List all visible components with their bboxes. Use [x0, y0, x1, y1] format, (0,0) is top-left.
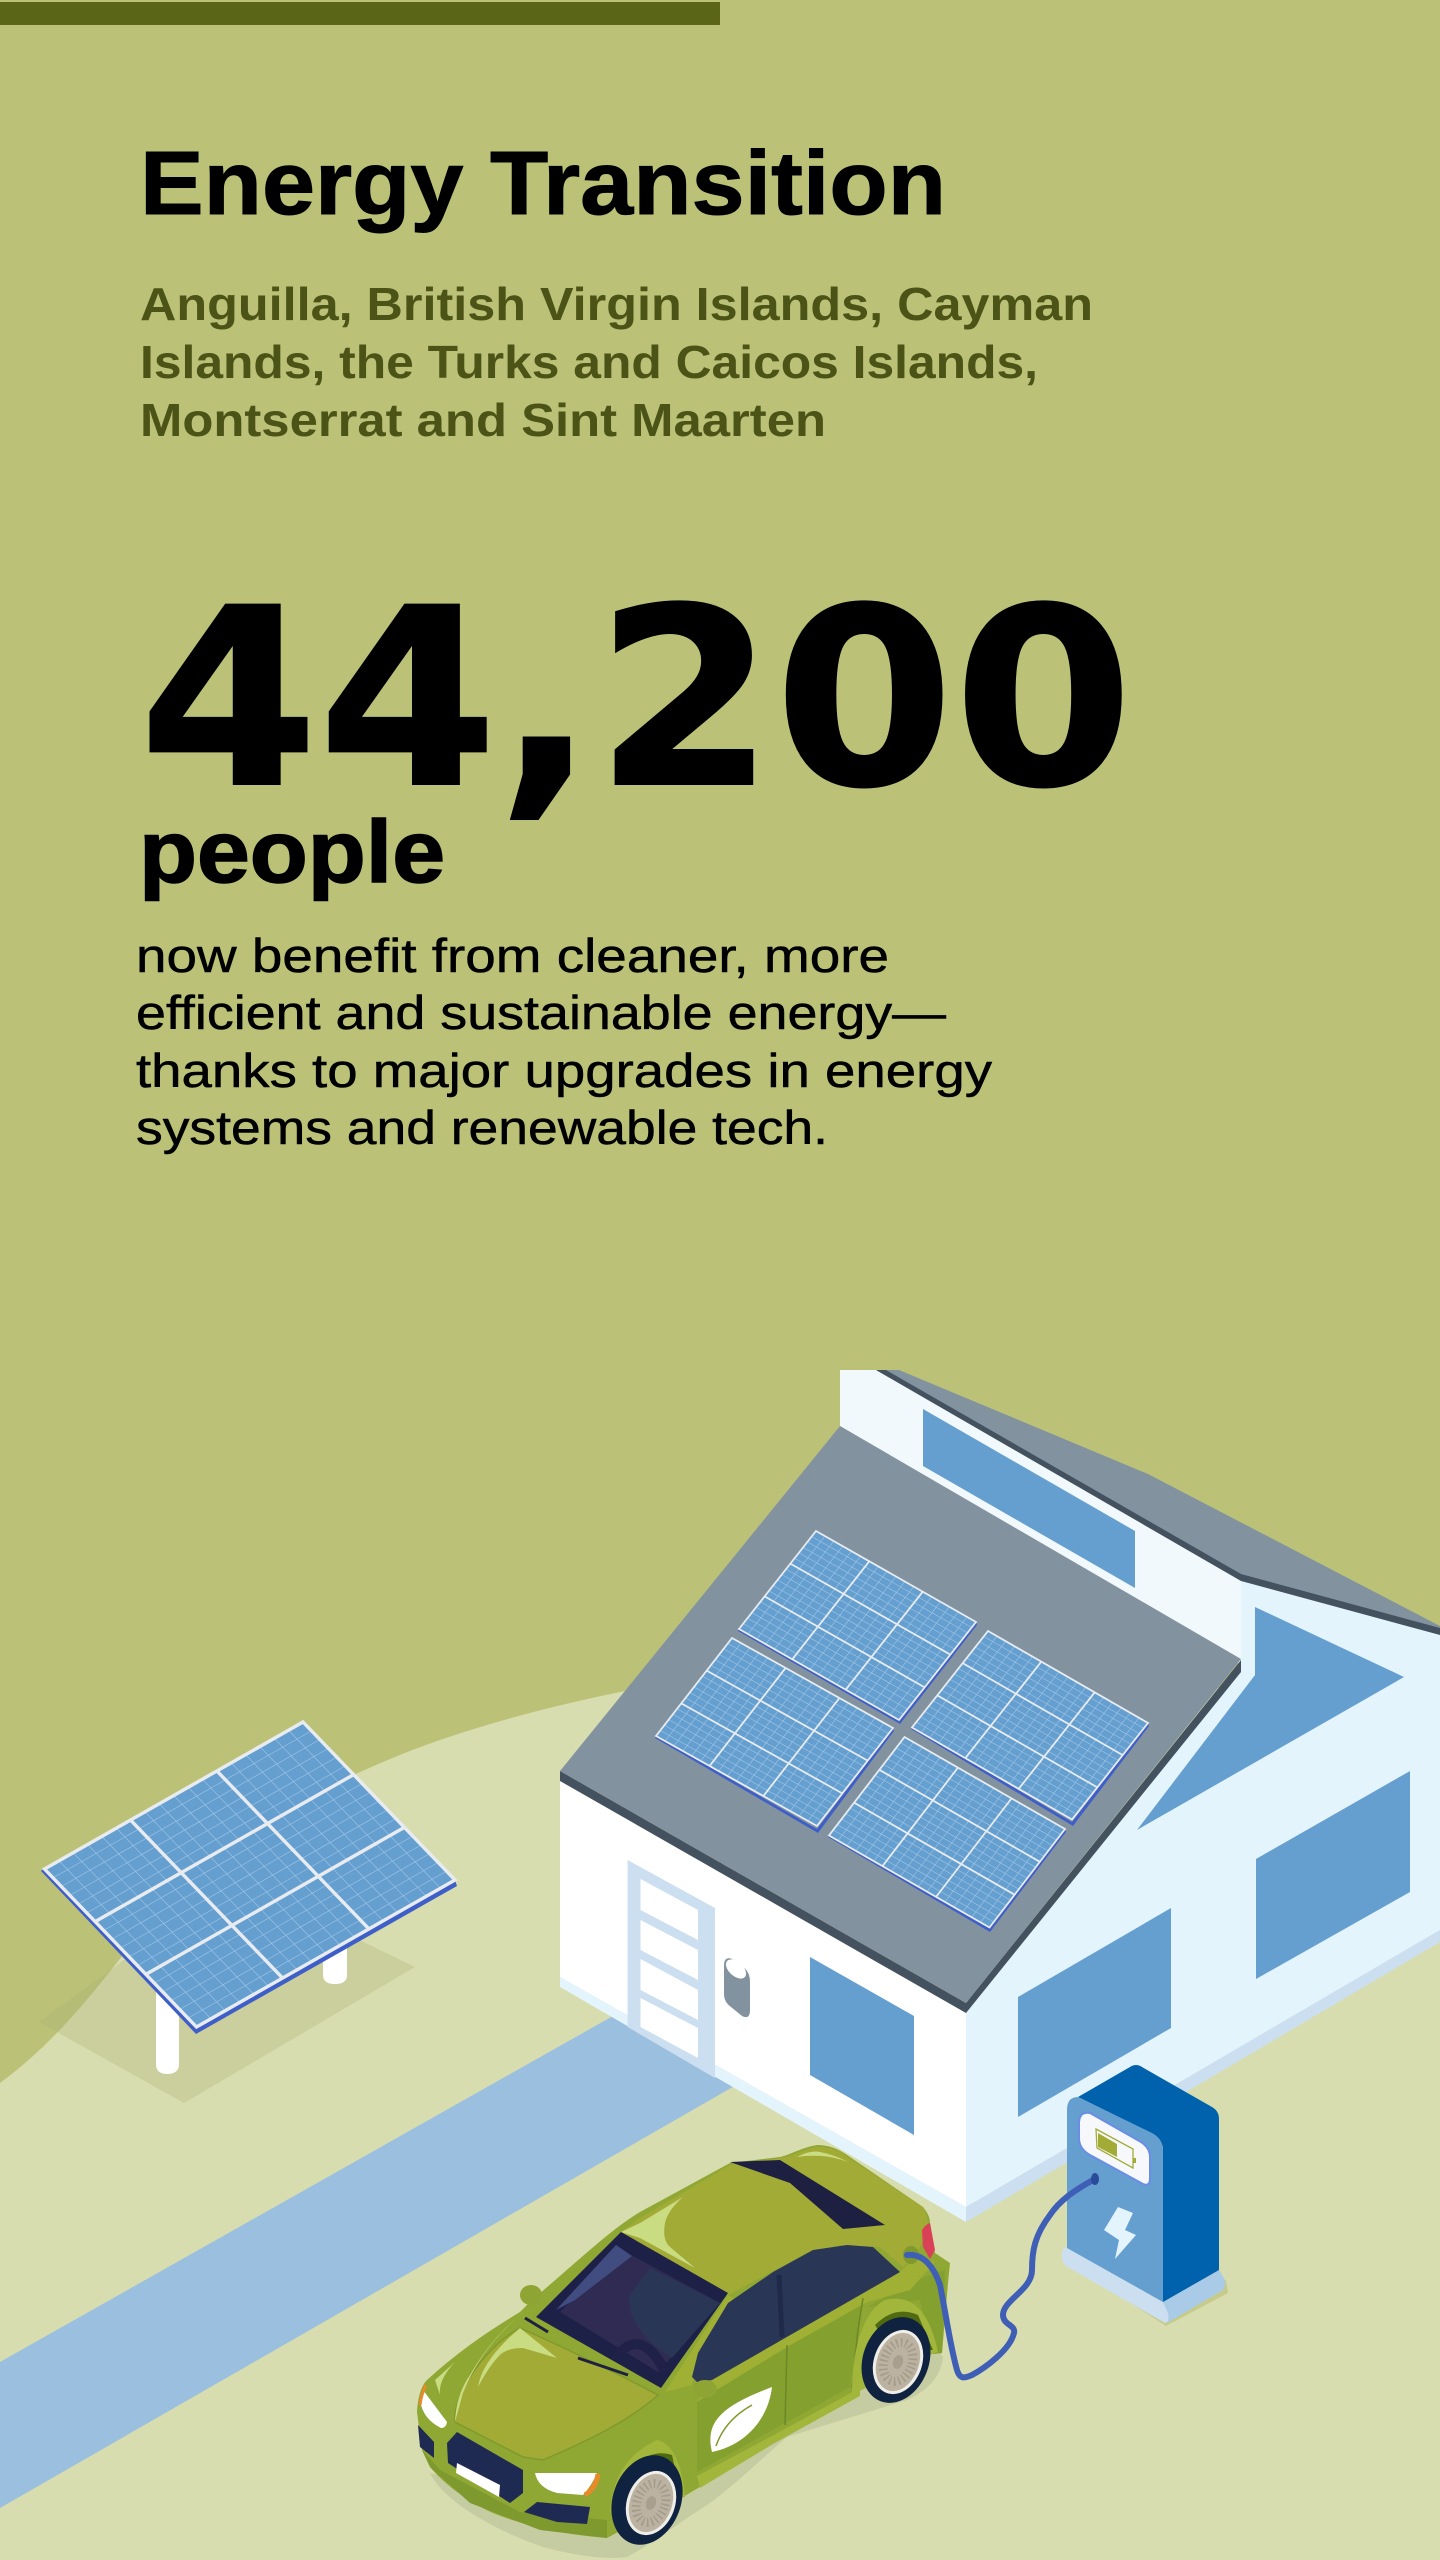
ground: [0, 1688, 1440, 2560]
description text: [136, 929, 993, 1154]
station front face: [1067, 2097, 1163, 2302]
rear window: [730, 2160, 885, 2229]
deck highlight: [797, 2152, 848, 2162]
description text: now benefit from cleaner, more: [136, 929, 889, 982]
description text: thanks to major upgrades in energy: [136, 1044, 993, 1097]
panel edge: [41, 1868, 457, 2034]
gable window: [1137, 1607, 1404, 1830]
back roof ridge: [876, 1370, 1440, 1635]
photovoltaic panel: [44, 1722, 455, 2027]
front leg: [156, 1990, 179, 2074]
driveway: [0, 2012, 800, 2508]
right indicator: [585, 2474, 598, 2495]
lightning bolt: [1104, 2207, 1136, 2259]
rear rim: [864, 2323, 932, 2401]
description text: efficient and sustainable energy—: [136, 986, 946, 1039]
subtitle: territories: Montserrat and Sint Maarten: [140, 394, 826, 446]
a-pillar: [665, 2295, 736, 2392]
charger screen: [1079, 2113, 1150, 2185]
right base strip: [966, 1930, 1440, 2222]
base shadow: [1062, 2258, 1228, 2326]
roof eave: [560, 1660, 1241, 2013]
front wall window: [810, 1957, 914, 2135]
windshield interior: [560, 2250, 720, 2372]
windshield glare: [556, 2245, 632, 2310]
side vent: [418, 2425, 434, 2458]
mirrors: [520, 2285, 717, 2398]
lower bumper: [422, 2450, 607, 2538]
description text: systems and renewable tech.: [136, 1101, 828, 1154]
main roof: [560, 1426, 1241, 2003]
windshield right pane: [629, 2268, 720, 2358]
hood: [455, 2328, 658, 2460]
station base side: [1163, 2270, 1225, 2323]
rear tyre: [850, 2307, 942, 2413]
subtitle: territories: [140, 278, 1093, 446]
car body: [417, 2145, 950, 2538]
door: [628, 1860, 715, 2078]
left headlight: [421, 2390, 447, 2428]
wipers: [525, 2318, 628, 2375]
front wall: [560, 1775, 966, 2207]
back leg: [323, 1945, 347, 1984]
charging cable: [907, 2180, 1093, 2377]
back roof: [876, 1370, 1440, 1640]
window pillar: [779, 2275, 782, 2337]
top accent bar: [0, 2, 720, 25]
upper wall: [840, 1370, 1241, 1665]
license plate: [456, 2463, 500, 2497]
front arch shade: [630, 2453, 680, 2490]
deck and roof: [621, 2147, 928, 2295]
EV charging station: [1062, 2065, 1228, 2326]
station base front: [1062, 2247, 1169, 2323]
right headlight: [535, 2473, 597, 2495]
windshield: [536, 2232, 728, 2388]
people label: people: [139, 802, 445, 901]
rear wheel arch: [852, 2299, 938, 2395]
rooftop solar panels: [655, 1531, 1149, 1932]
front wheel arch: [610, 2440, 685, 2513]
station side face: [1078, 2065, 1219, 2302]
tail light: [922, 2223, 935, 2259]
right wall lower window: [1018, 1908, 1171, 2117]
front rim: [617, 2464, 685, 2542]
subtitle: territories: Anguilla, British Virgin Islands, Cayman: [140, 278, 1093, 330]
leaf logo: [710, 2387, 772, 2452]
door seams: [785, 2298, 863, 2425]
electric car: [417, 2145, 950, 2558]
car shadow: [430, 2300, 943, 2558]
charge port: [903, 2246, 919, 2264]
beltline: [697, 2255, 935, 2402]
left indicator: [420, 2385, 426, 2405]
clerestory window: [923, 1409, 1135, 1588]
grille: [447, 2432, 523, 2503]
rear arch shade: [875, 2312, 933, 2350]
hood highlights: [435, 2318, 557, 2422]
title: Energy Transition: [140, 134, 946, 234]
battery icon: [1096, 2129, 1136, 2168]
right wall upper window: [1256, 1771, 1410, 1979]
side sill: [697, 2388, 860, 2488]
house: [560, 1370, 1440, 2222]
subtitle: territories: Islands, the Turks and Caicos Islands,: [140, 336, 1038, 388]
doorbell: [722, 1956, 750, 2017]
side windows: [692, 2245, 900, 2382]
solar array on ground: [39, 1722, 457, 2103]
big number: 44,200: [139, 557, 1133, 843]
roof highlight: [621, 2197, 695, 2268]
cable plug: [1091, 2173, 1099, 2185]
rear quarter: [867, 2270, 945, 2354]
right wall: [966, 1578, 1440, 2207]
front base strip: [560, 1977, 966, 2222]
lower vent: [524, 2502, 590, 2524]
steering wheel: [615, 2344, 665, 2372]
panel shadow: [39, 1937, 415, 2103]
door panels: [697, 2298, 863, 2472]
front tyre: [599, 2445, 695, 2555]
